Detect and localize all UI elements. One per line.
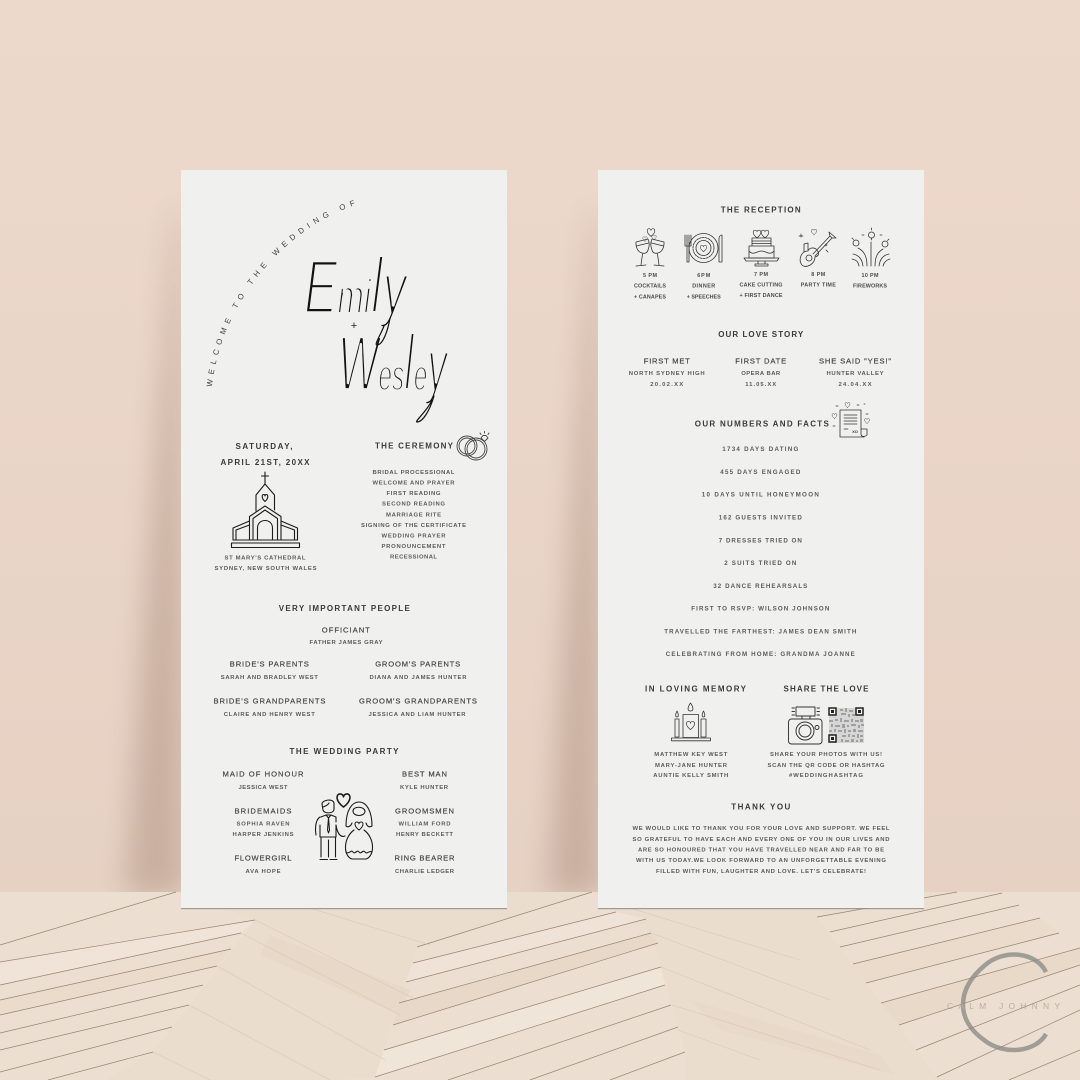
thank you message: FILLED WITH FUN, LAUGHTER AND LOVE. LET'S CELEBRATE! — [656, 869, 866, 875]
very important people: GROOM'S GRANDPARENTS — [359, 697, 477, 706]
thank you heading: THANK YOU — [731, 802, 791, 812]
thank you message: SO GRATEFUL TO HAVE EACH AND EVERY ONE OF YOU IN OUR LIVES AND — [632, 837, 890, 843]
our love story: OUR LOVE STORY — [718, 330, 804, 339]
facts list: FIRST TO RSVP: WILSON JOHNSON — [691, 606, 830, 612]
reception schedule labels: 5 PM — [643, 273, 658, 279]
the wedding party: RING BEARER — [394, 854, 455, 863]
ceremony order list: MARRIAGE RITE — [386, 512, 441, 518]
reception schedule labels: 8 PM — [811, 272, 826, 278]
very important people: BRIDE'S GRANDPARENTS — [214, 697, 326, 706]
the wedding party: HENRY BECKETT — [396, 832, 453, 838]
share instructions: #WEDDINGHASHTAG — [789, 773, 863, 779]
very important people: VERY IMPORTANT PEOPLE — [279, 604, 410, 613]
arched welcome line: WELCOME TO THE WEDDING OF — [206, 200, 354, 386]
memorial names: MARY-JANE HUNTER — [655, 763, 728, 769]
the wedding party — [222, 747, 455, 875]
icon: fireworks — [852, 228, 890, 266]
icon: guitar — [799, 229, 836, 266]
our love story: FIRST MET — [644, 356, 690, 365]
date heading: APRIL 21ST, 20XX — [220, 458, 310, 467]
very important people — [214, 604, 477, 718]
reception schedule labels: CAKE CUTTING — [740, 283, 782, 289]
the wedding party: GROOMSMEN — [395, 807, 454, 816]
very important people: FATHER JAMES GRAY — [310, 640, 383, 646]
our love story: FIRST DATE — [735, 356, 786, 365]
facts list: 32 DANCE REHEARSALS — [713, 583, 807, 590]
very important people: OFFICIANT — [322, 625, 370, 634]
icon: church — [232, 472, 300, 548]
church address — [214, 556, 317, 572]
our love story: 20.02.XX — [650, 382, 683, 388]
ceremony order list: FIRST READING — [386, 491, 441, 497]
icon: wedding cake — [744, 230, 779, 266]
ceremony order list: SIGNING OF THE CERTIFICATE — [361, 523, 466, 529]
the wedding party: BEST MAN — [402, 770, 447, 779]
reception schedule labels: COCKTAILS — [634, 284, 666, 290]
very important people: GROOM'S PARENTS — [375, 660, 460, 669]
QR code — [829, 708, 864, 743]
numbers and facts heading: OUR NUMBERS AND FACTS — [695, 420, 829, 429]
share instructions — [768, 752, 885, 779]
in loving memory heading: IN LOVING MEMORY — [645, 685, 747, 694]
the wedding party: MAID OF HONOUR — [222, 770, 304, 779]
ceremony order list: WELCOME AND PRAYER — [372, 480, 455, 486]
thank you message: ARE SO HONOURED THAT YOU HAVE TRAVELLED NEAR AND FAR TO BE — [638, 848, 884, 854]
facts list: 162 GUESTS INVITED — [719, 514, 802, 522]
watermark logo: CALM JOHNNY — [947, 1001, 1060, 1011]
the wedding party: THE WEDDING PARTY — [290, 747, 399, 756]
the wedding party: WILLIAM FORD — [398, 822, 450, 828]
thank you message: WITH US TODAY.WE LOOK FORWARD TO AN UNFORGETTABLE EVENING — [636, 858, 886, 864]
card shadows on wall — [125, 200, 602, 895]
date heading: SATURDAY, — [236, 442, 292, 451]
memorial names — [653, 752, 728, 779]
the wedding party: FLOWERGIRL — [234, 854, 292, 863]
our love story: SHE SAID "YES!" — [819, 356, 891, 365]
our love story: NORTH SYDNEY HIGH — [629, 371, 705, 377]
very important people: DIANA AND JAMES HUNTER — [370, 675, 467, 681]
the wedding party: JESSICA WEST — [238, 785, 288, 791]
ceremony order list: RECESSIONAL — [390, 555, 437, 561]
share the love heading: SHARE THE LOVE — [784, 685, 869, 694]
icon: camera — [788, 707, 822, 744]
reception schedule labels: PARTY TIME — [801, 283, 836, 289]
the wedding party: KYLE HUNTER — [400, 785, 449, 791]
church address: ST MARY'S CATHEDRAL — [224, 556, 306, 562]
facts list: 7 DRESSES TRIED ON — [719, 538, 802, 544]
share instructions: SHARE YOUR PHOTOS WITH US! — [770, 752, 882, 758]
ceremony order list — [361, 470, 466, 561]
reception schedule labels: 7 PM — [754, 272, 768, 278]
left card — [181, 170, 507, 910]
our love story: 11.05.XX — [745, 382, 776, 388]
very important people: SARAH AND BRADLEY WEST — [221, 675, 318, 681]
thank you message: WE WOULD LIKE TO THANK YOU FOR YOUR LOVE AND SUPPORT. WE FEEL — [632, 826, 890, 832]
wooden herringbone floor — [0, 892, 1080, 1080]
memorial names: MATTHEW KEY WEST — [654, 752, 728, 758]
date heading — [220, 442, 310, 467]
facts list — [664, 446, 857, 658]
right card — [598, 170, 924, 909]
facts list: 2 SUITS TRIED ON — [724, 560, 797, 567]
watermark logo — [947, 955, 1060, 1050]
facts list: 455 DAYS ENGAGED — [720, 469, 801, 476]
share instructions: SCAN THE QR CODE OR HASHTAG — [768, 763, 885, 769]
ceremony order list: BRIDAL PROCESSIONAL — [372, 470, 455, 476]
reception schedule labels: + CANAPES — [634, 294, 666, 300]
the wedding party: AVA HOPE — [246, 869, 281, 875]
icon: scroll with hearts — [832, 403, 869, 437]
ceremony heading: THE CEREMONY — [375, 442, 454, 450]
couple names — [304, 242, 449, 422]
our love story — [629, 330, 891, 388]
icon: scroll with hearts: XO — [852, 429, 858, 434]
thank you message — [632, 826, 890, 875]
reception schedule labels: 6PM — [697, 273, 711, 279]
ceremony order list: WEDDING PRAYER — [382, 533, 446, 539]
icon: wedding rings — [457, 432, 489, 460]
facts list: TRAVELLED THE FARTHEST: JAMES DEAN SMITH — [664, 628, 857, 636]
our love story: OPERA BAR — [741, 371, 781, 377]
couple names: + — [351, 320, 357, 332]
our love story: HUNTER VALLEY — [826, 371, 884, 377]
ceremony order list: SECOND READING — [382, 502, 445, 508]
memorial names: AUNTIE KELLY SMITH — [653, 773, 728, 779]
reception schedule labels: + FIRST DANCE — [740, 293, 783, 299]
facts list: 1734 DAYS DATING — [722, 446, 798, 453]
the wedding party: BRIDEMAIDS — [234, 807, 292, 816]
icon: wine glasses — [636, 229, 664, 266]
reception heading: THE RECEPTION — [721, 206, 801, 215]
very important people: CLAIRE AND HENRY WEST — [224, 712, 315, 718]
reception schedule labels — [634, 272, 887, 300]
icon: memorial candles — [672, 703, 710, 741]
icon: plate and cutlery — [685, 234, 722, 262]
the wedding party: HARPER JENKINS — [232, 832, 294, 838]
church address: SYDNEY, NEW SOUTH WALES — [214, 566, 317, 572]
couple names: Emily — [304, 242, 409, 331]
reception schedule labels: DINNER — [692, 284, 715, 290]
the wedding party: SOPHIA RAVEN — [236, 822, 290, 828]
reception schedule labels: FIREWORKS — [853, 284, 887, 290]
facts list: CELEBRATING FROM HOME: GRANDMA JOANNE — [666, 651, 855, 658]
facts list: 10 DAYS UNTIL HONEYMOON — [702, 492, 819, 498]
ceremony order list: PRONOUNCEMENT — [382, 544, 446, 550]
very important people: JESSICA AND LIAM HUNTER — [368, 712, 466, 718]
very important people: BRIDE'S PARENTS — [230, 660, 309, 669]
the wedding party: CHARLIE LEDGER — [395, 869, 455, 875]
reception schedule labels: 10 PM — [862, 273, 879, 279]
our love story: 24.04.XX — [838, 382, 872, 388]
reception schedule labels: + SPEECHES — [687, 294, 721, 300]
icon: bride and groom — [315, 794, 373, 860]
couple names: Wesley — [338, 318, 449, 407]
